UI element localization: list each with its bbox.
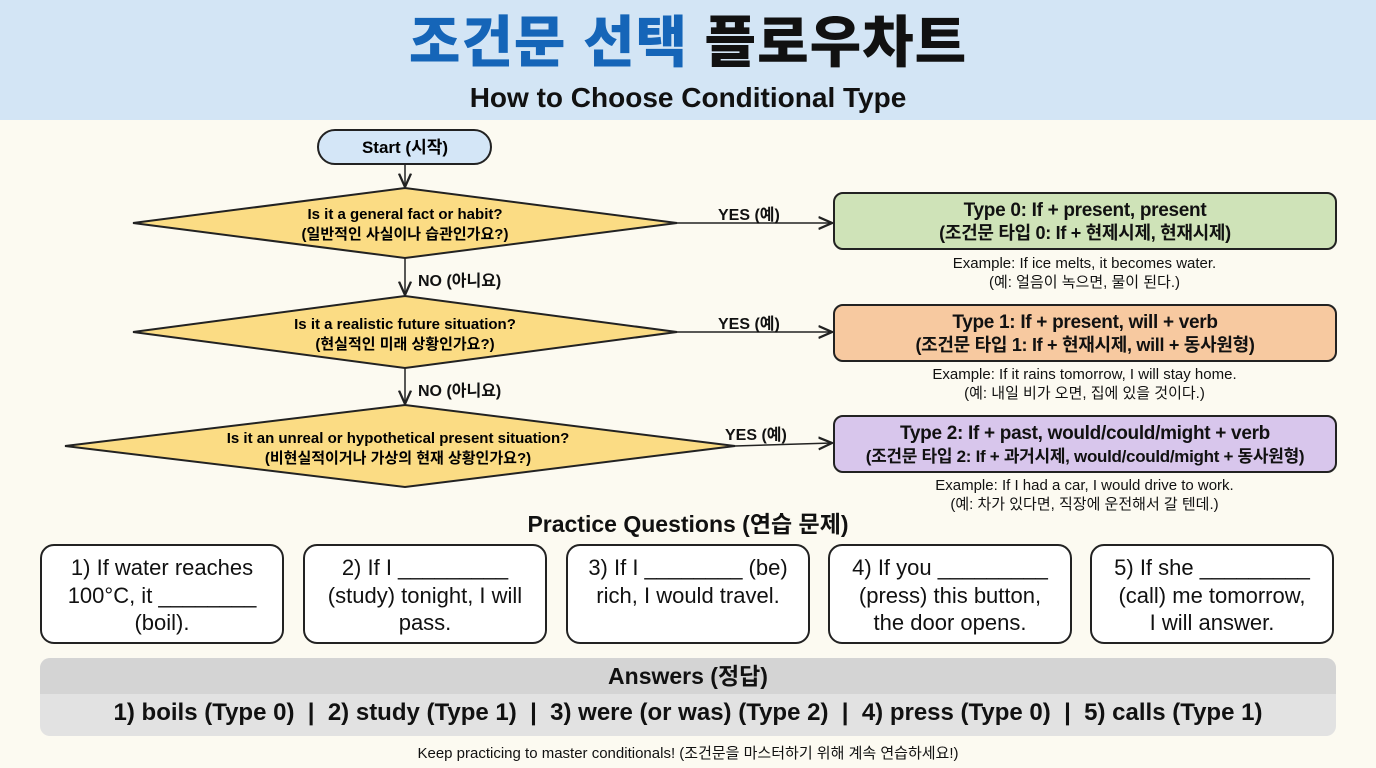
diamond q2 bbox=[133, 296, 677, 368]
card 3: rich, I would travel. bbox=[596, 582, 780, 608]
type 0 box: Type 0: If + present, present bbox=[964, 200, 1206, 221]
example type 1: (예: 내일 비가 오면, 집에 있을 것이다.) bbox=[964, 385, 1205, 402]
example type 0: Example: If ice melts, it becomes water. bbox=[953, 255, 1216, 272]
start node: Start (시작) bbox=[362, 138, 448, 157]
diamond q1: Is it a general fact or habit? bbox=[307, 206, 503, 223]
type 2 box: Type 2: If + past, would/could/might + verb bbox=[900, 423, 1270, 444]
diamond q1 bbox=[133, 188, 677, 258]
card 5: (call) me tomorrow, bbox=[1118, 582, 1306, 608]
card 4 bbox=[828, 544, 1072, 644]
diamond q3 bbox=[65, 405, 735, 487]
card 3 bbox=[566, 544, 810, 644]
start node bbox=[318, 130, 491, 164]
type 0 box bbox=[833, 192, 1337, 250]
arrow yes 3 bbox=[735, 443, 832, 446]
type 1 box: (조건문 타입 1: If + 현재시제, will + 동사원형) bbox=[915, 335, 1255, 355]
header band bbox=[0, 0, 1376, 120]
diamond q2: Is it a realistic future situation? bbox=[294, 316, 516, 333]
footer note: Keep practicing to master conditionals! (조건문을 마스터하기 위해 계속 연습하세요!) bbox=[417, 745, 959, 762]
card 2 bbox=[303, 544, 547, 644]
card 4: 4) If you _________ bbox=[852, 555, 1048, 580]
card 2: pass. bbox=[399, 610, 451, 635]
label yes 1: YES (예) bbox=[718, 207, 780, 224]
diamond q3: Is it an unreal or hypothetical present situation? bbox=[227, 430, 569, 447]
type 2 box bbox=[833, 415, 1337, 473]
example type 0: (예: 얼음이 녹으면, 물이 된다.) bbox=[989, 274, 1180, 291]
label yes 3: YES (예) bbox=[725, 427, 787, 444]
card 3: 3) If I ________ (be) bbox=[588, 555, 788, 580]
card 5: I will answer. bbox=[1150, 610, 1274, 635]
answers heading: Answers (정답) bbox=[608, 663, 768, 689]
card 1 bbox=[40, 544, 284, 644]
arrow yes 2 bbox=[677, 331, 832, 333]
arrow: start to q1 bbox=[404, 164, 406, 187]
flowchart diagram bbox=[64, 129, 833, 488]
type 1 box bbox=[833, 304, 1337, 362]
card 4: (press) this button, bbox=[859, 582, 1041, 608]
example type 0 bbox=[953, 255, 1216, 291]
card 2: 2) If I _________ bbox=[342, 555, 508, 580]
example type 1: Example: If it rains tomorrow, I will stay home. bbox=[932, 366, 1237, 383]
label no 2: NO (아니요) bbox=[418, 383, 501, 400]
diamond q2: (현실적인 미래 상황인가요?) bbox=[315, 336, 495, 353]
type 0 box: (조건문 타입 0: If + 현제시제, 현재시제) bbox=[939, 223, 1231, 243]
arrow no 1 bbox=[404, 258, 406, 295]
subtitle: How to Choose Conditional Type bbox=[470, 82, 906, 113]
card 1: 1) If water reaches bbox=[71, 555, 253, 580]
card 5 bbox=[1090, 544, 1334, 644]
type 1 box: Type 1: If + present, will + verb bbox=[952, 312, 1218, 333]
card 1: (boil). bbox=[134, 610, 190, 635]
label no 1: NO (아니요) bbox=[418, 273, 501, 290]
arrow no 2 bbox=[404, 368, 406, 404]
diamond q3: (비현실적이거나 가상의 현재 상황인가요?) bbox=[265, 450, 531, 467]
label yes 2: YES (예) bbox=[718, 316, 780, 333]
example type 2: (예: 차가 있다면, 직장에 운전해서 갈 텐데.) bbox=[950, 496, 1219, 513]
diamond q1: (일반적인 사실이나 습관인가요?) bbox=[302, 226, 508, 243]
example type 2 bbox=[935, 477, 1234, 513]
answers panel bbox=[40, 658, 1336, 736]
example type 2: Example: If I had a car, I would drive to work. bbox=[935, 477, 1234, 494]
type 2 box: (조건문 타입 2: If + 과거시제, would/could/might + 동사원형) bbox=[866, 447, 1304, 466]
answers list: 1) boils (Type 0) | 2) study (Type 1) | 3) were (or was) (Type 2) | 4) press (Type 0) | 5) calls (Type 1) bbox=[114, 699, 1262, 726]
question cards bbox=[40, 544, 1334, 644]
arrow yes 1 bbox=[677, 222, 832, 224]
title: 조건문 선택 플로우차트 bbox=[409, 11, 967, 74]
example type 1 bbox=[932, 366, 1237, 402]
card 2: (study) tonight, I will bbox=[328, 582, 522, 608]
practice heading: Practice Questions (연습 문제) bbox=[527, 511, 849, 537]
card 1: 100°C, it ________ bbox=[68, 582, 256, 608]
card 4: the door opens. bbox=[874, 610, 1026, 635]
card 5: 5) If she _________ bbox=[1114, 555, 1310, 580]
